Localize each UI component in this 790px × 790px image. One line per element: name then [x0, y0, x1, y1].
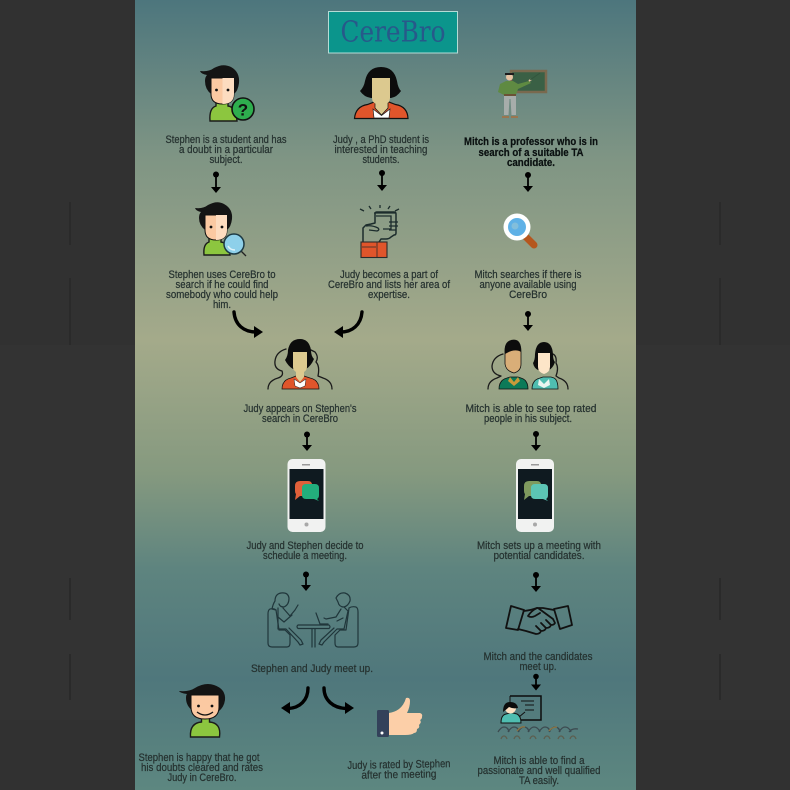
text: Mitch sets up: potential candidates.: [494, 550, 584, 562]
text: Mitch is able to find: [478, 755, 600, 787]
text: Mitch intro: candidate.: [507, 157, 555, 169]
text: Stephen is happy: Stephen is happy that he got: [138, 752, 260, 764]
text: Judy becomes a part: Judy becomes a part of: [340, 269, 439, 281]
text: Judy intro: Judy , a PhD student is: [333, 134, 429, 146]
text: Judy and Stephen decide: Judy and Stephen decide to: [246, 540, 364, 552]
text: Mitch is able to find: passionate and well qualified: [478, 765, 600, 777]
text: Judy becomes a part: expertise.: [368, 289, 410, 301]
text: Stephen is a student: subject.: [210, 154, 242, 166]
icon: Stephen searching: [195, 202, 246, 256]
icon: Mitch magnifier: [504, 214, 534, 245]
text: Judy appears: Judy appears on Stephen's: [244, 403, 357, 415]
arrow: [531, 674, 541, 690]
text: Judy becomes a part: CereBro and lists her area of: [328, 279, 451, 291]
text: Stephen uses CereBro: him.: [213, 299, 231, 311]
text: Stephen is happy: [138, 752, 263, 784]
text: Judy appears: search in CereBro: [262, 413, 338, 425]
icon: Stephen with question: [200, 65, 254, 121]
text: Mitch searches: anyone available using: [480, 279, 576, 291]
arrow: [377, 170, 387, 191]
icon: professor at chalkboard: [498, 71, 546, 117]
arrow: [531, 572, 541, 592]
text: Mitch top rated: [466, 403, 596, 425]
icon: Judy: [354, 67, 408, 118]
text: Judy is rated: [347, 758, 451, 782]
curved arrow right: [334, 312, 362, 338]
text: Stephen uses CereBro: search if he could find: [176, 279, 268, 291]
curved arrow left: [234, 312, 263, 338]
text: Mitch searches: CereBro: [509, 289, 547, 301]
text: Stephen and Judy meet up: Stephen and Judy meet up.: [251, 663, 373, 675]
text: Judy intro: interested in teaching: [334, 144, 428, 156]
text: Mitch intro: Mitch is a professor who is in: [464, 136, 598, 148]
text: Judy appears: [244, 403, 357, 425]
arrow: [301, 572, 311, 591]
text: Mitch top rated: people in his subject.: [484, 413, 572, 425]
icon: Stephen with question: ?: [238, 100, 248, 120]
icon: teacher with audience: [498, 696, 578, 739]
icon: handshake: [506, 606, 572, 634]
icon: phone with olive and teal chat: [516, 459, 554, 532]
text: Judy and Stephen decide: [246, 540, 364, 562]
text: Mitch top rated: Mitch is able to see top rated: [466, 403, 596, 415]
text: Stephen is a student: Stephen is a student and has: [166, 134, 287, 146]
text: Stephen uses CereBro: Stephen uses CereBro to: [168, 269, 276, 281]
text: Stephen is happy: his doubts cleared and rates: [141, 762, 263, 774]
curved arrow bottom left: [281, 688, 308, 714]
arrow: [302, 432, 312, 451]
arrow: [211, 172, 221, 193]
text: Stephen uses CereBro: somebody who could help: [166, 289, 278, 301]
icon: happy Stephen: [179, 684, 225, 737]
curved arrow bottom right: [324, 688, 354, 714]
icon: Judy with phone and card: [360, 205, 399, 258]
icon: phone with orange and green chat: [288, 459, 326, 532]
text: Mitch intro: [464, 136, 598, 169]
text: Stephen is a student: a doubt in a particular: [179, 144, 273, 156]
text: Judy is rated: after the meeting: [361, 768, 437, 782]
text: Mitch is able to find: Mitch is able to find a: [494, 755, 585, 767]
text: Mitch and candidates: [484, 651, 593, 673]
text: Stephen is happy: Judy in CereBro.: [168, 772, 236, 784]
text: Judy becomes a part: [328, 269, 451, 301]
text: Judy intro: [333, 134, 429, 166]
text: Mitch sets up: Mitch sets up a meeting with: [477, 540, 601, 552]
icon: top rated people: [488, 340, 568, 389]
arrow: [531, 431, 541, 451]
arrow: [523, 311, 533, 331]
text: Judy intro: students.: [362, 154, 400, 166]
icon: two people meeting at table: [268, 593, 358, 647]
text: Judy is rated: Judy is rated by Stephen: [347, 758, 451, 772]
text: Stephen is a student: [166, 134, 287, 166]
text: Mitch and candidates: meet up.: [520, 661, 556, 673]
text: Mitch intro: search of a suitable TA: [478, 147, 584, 159]
arrow: [523, 172, 533, 192]
icon: thumbs up: [377, 698, 422, 737]
title: CereBro: [340, 14, 446, 48]
text: Mitch sets up: [477, 540, 601, 562]
text: Judy and Stephen decide: schedule a meeting.: [263, 550, 347, 562]
text: Mitch is able to find: TA easily.: [519, 775, 559, 787]
infographic panel: [135, 0, 636, 790]
icon: Judy in search results: [268, 339, 332, 389]
text: Stephen uses CereBro: [166, 269, 278, 311]
text: Mitch searches: [474, 269, 582, 301]
text: Mitch searches: Mitch searches if there is: [474, 269, 582, 281]
text: Mitch and candidates: Mitch and the candidates: [484, 651, 593, 663]
